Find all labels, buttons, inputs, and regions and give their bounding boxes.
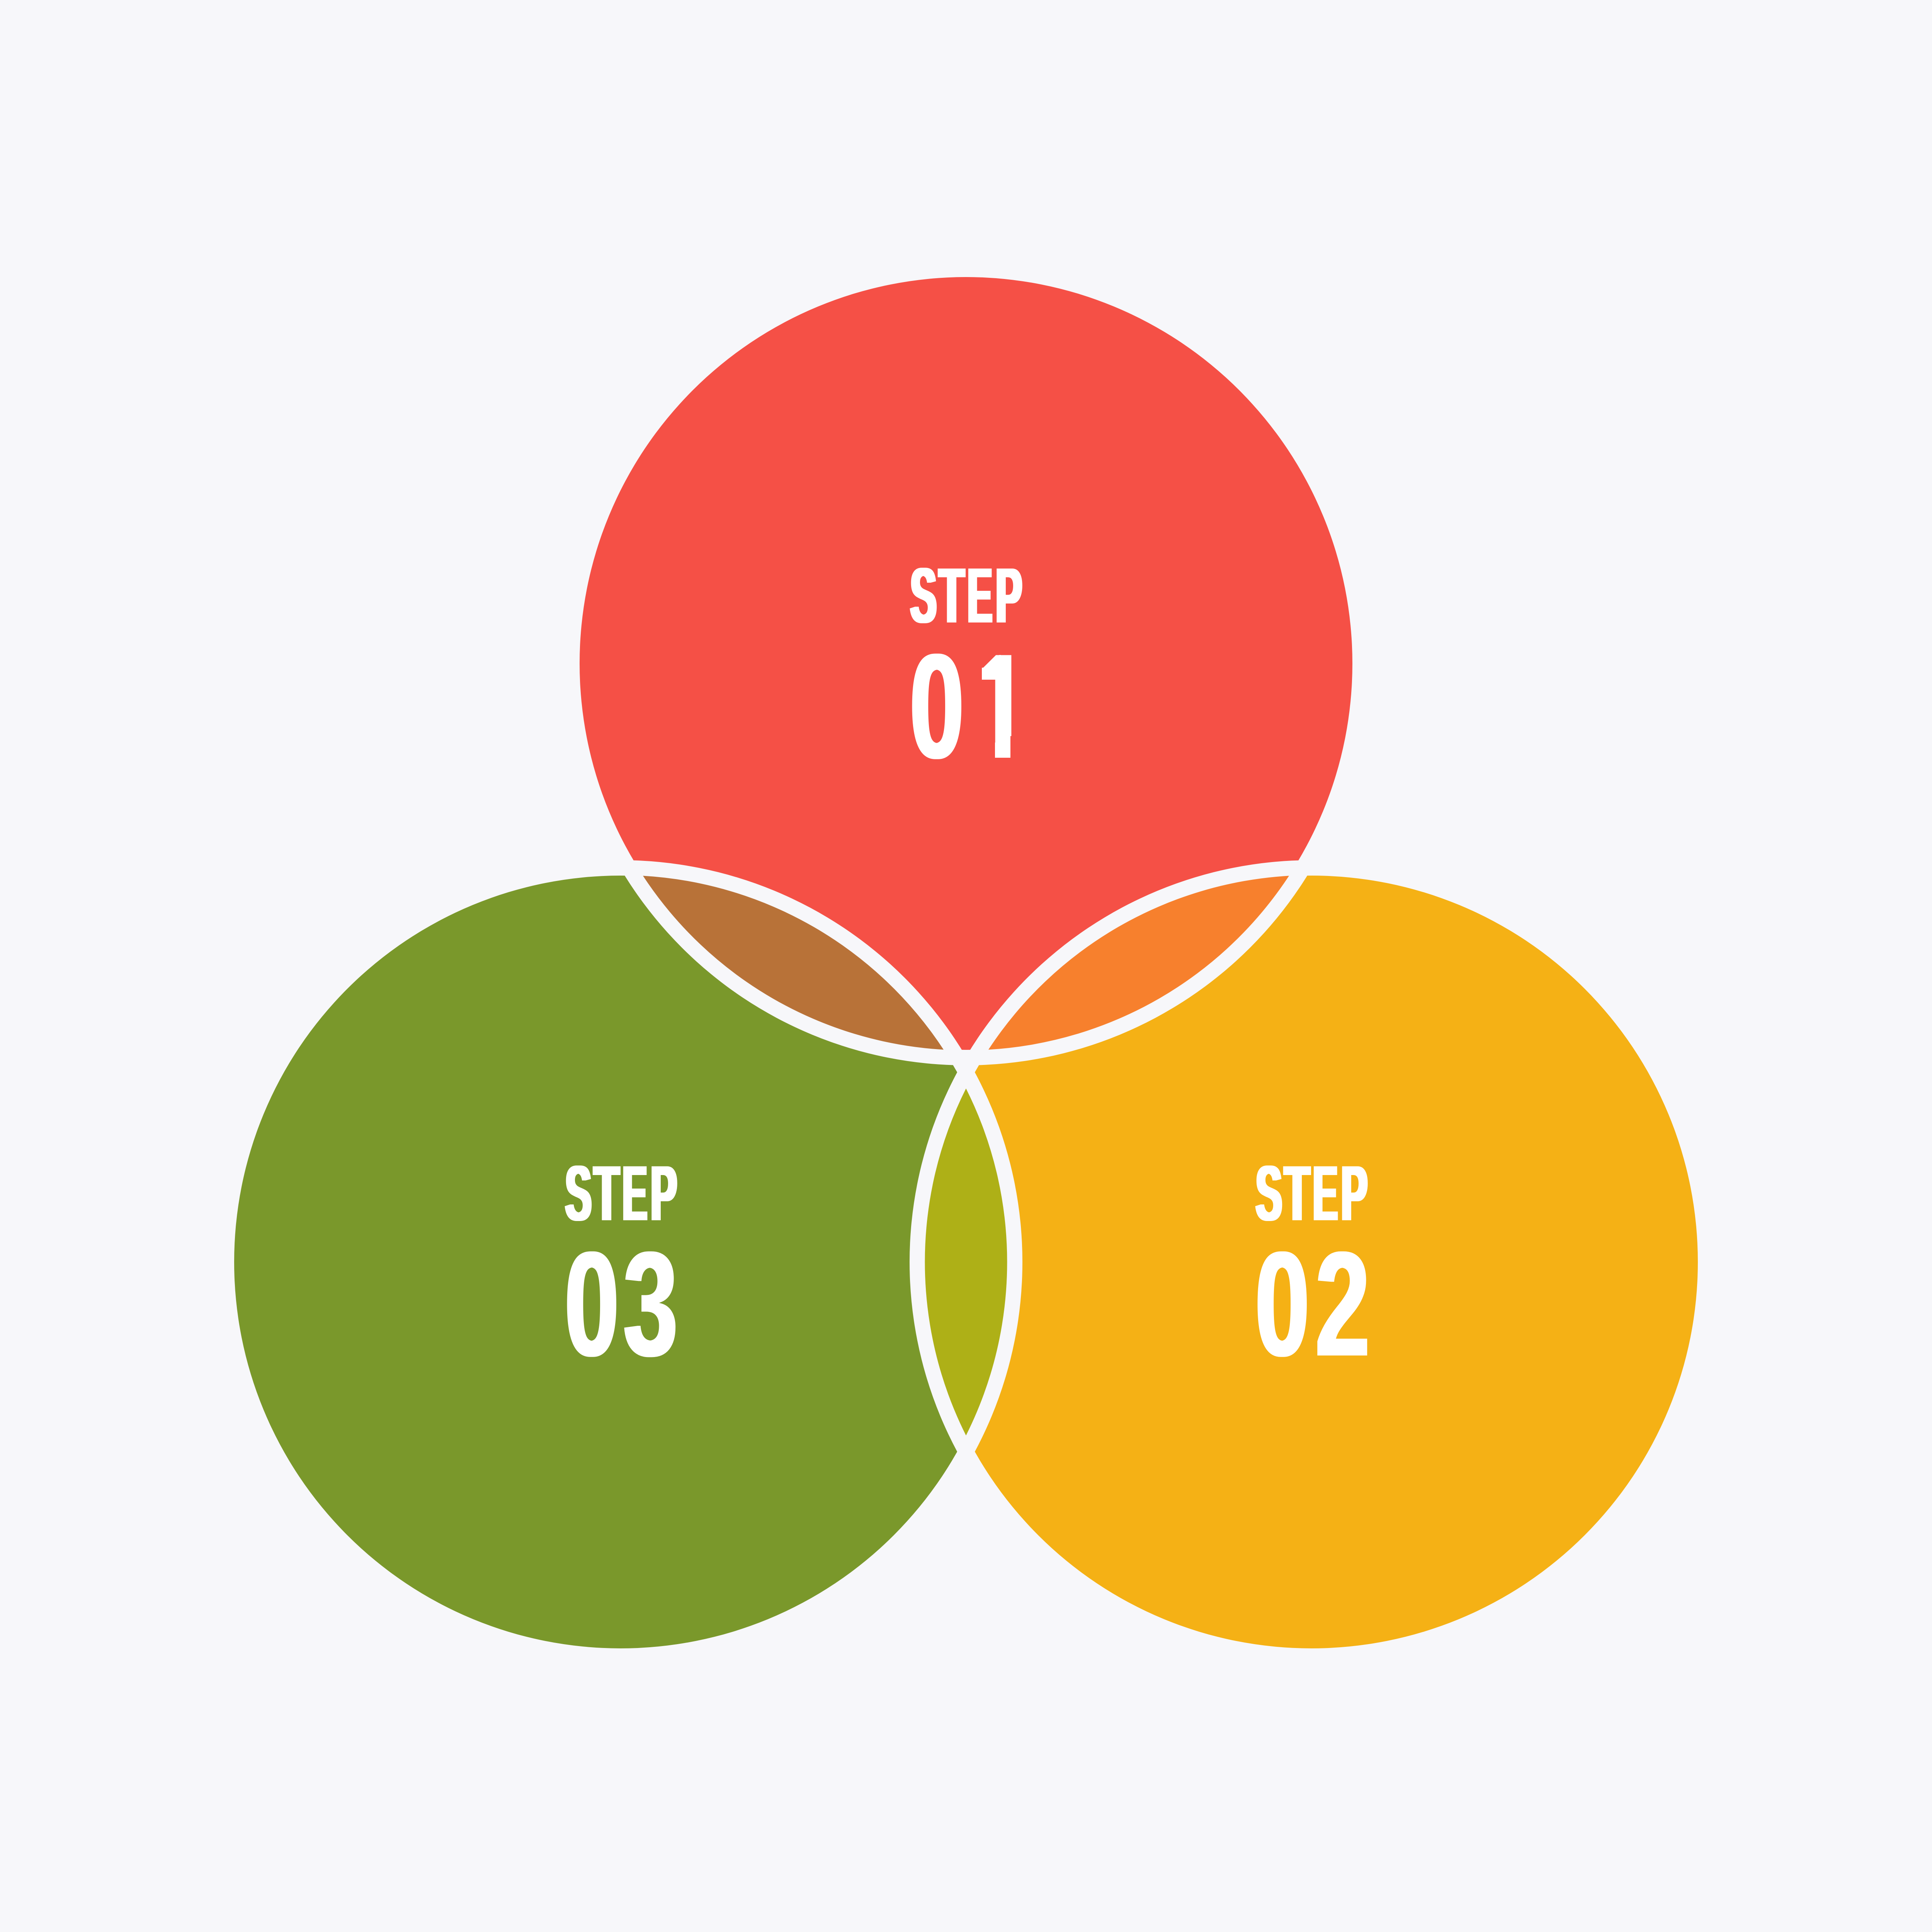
step word 02: P	[1341, 1150, 1367, 1237]
overlap: red and green	[643, 876, 944, 1049]
step word 03: P	[651, 1150, 677, 1237]
step word 03	[565, 1149, 677, 1237]
label: step 01	[910, 551, 1030, 790]
circle: step 03 green	[234, 876, 1007, 1648]
step word 03: T	[594, 1150, 619, 1237]
step word 02: S	[1256, 1150, 1282, 1237]
step number 01: 1	[974, 623, 1028, 790]
step number 03: 0	[565, 1221, 619, 1388]
overlap: red and yellow	[988, 876, 1289, 1049]
step word 03: E	[622, 1149, 647, 1237]
step number 01: 0	[910, 623, 964, 790]
step word 02: T	[1284, 1150, 1310, 1237]
step word 03: S	[565, 1150, 592, 1237]
label: step 03	[565, 1149, 678, 1388]
step number 03	[565, 1221, 678, 1388]
step number 02	[1255, 1221, 1370, 1388]
step number 02: 2	[1315, 1221, 1370, 1388]
step number 03: 3	[623, 1221, 678, 1388]
step word 01: S	[910, 552, 937, 639]
step word 01: E	[968, 551, 992, 639]
step word 01: P	[996, 552, 1022, 639]
step word 01: T	[939, 552, 964, 639]
step number 01	[910, 623, 1030, 790]
step word 01	[910, 551, 1022, 639]
overlap: green and yellow	[925, 1088, 1007, 1435]
step word 02: E	[1313, 1149, 1338, 1237]
circle: step 01 red	[580, 277, 1352, 1050]
step number 02: 0	[1255, 1221, 1310, 1388]
circle: step 02 yellow	[925, 876, 1698, 1648]
step word 02	[1256, 1149, 1367, 1237]
label: step 02	[1255, 1149, 1370, 1388]
